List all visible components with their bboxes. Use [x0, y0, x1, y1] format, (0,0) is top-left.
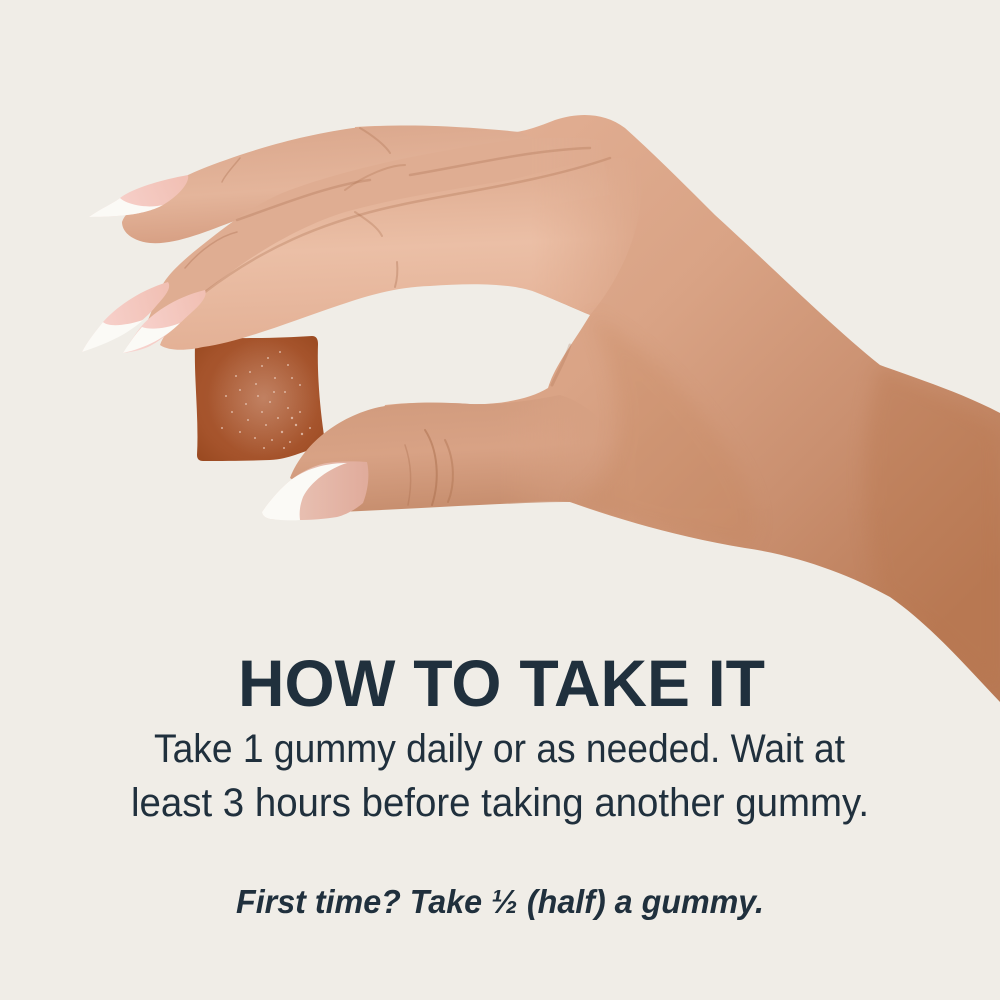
first-time note: First time? Take ½ (half) a gummy. [236, 883, 764, 920]
nail: middle finger [82, 282, 169, 352]
instructions text [131, 727, 869, 825]
nail: top finger [89, 175, 188, 217]
index finger [160, 193, 614, 350]
instructions text: Take 1 gummy daily or as needed. Wait at [154, 727, 845, 771]
nail: index finger [123, 290, 206, 353]
photo: hand holding gummy [82, 115, 1000, 702]
hand creases and shadows [185, 128, 610, 505]
instructions text: least 3 hours before taking another gummy. [131, 781, 869, 825]
thumb [290, 402, 572, 512]
back of hand and wrist [340, 115, 1000, 702]
nail: thumb [262, 461, 368, 520]
top finger [122, 126, 518, 320]
gummy [195, 336, 325, 461]
wrist and palm shading [570, 315, 1000, 700]
middle finger [148, 179, 385, 320]
title: HOW TO TAKE IT [238, 646, 765, 720]
